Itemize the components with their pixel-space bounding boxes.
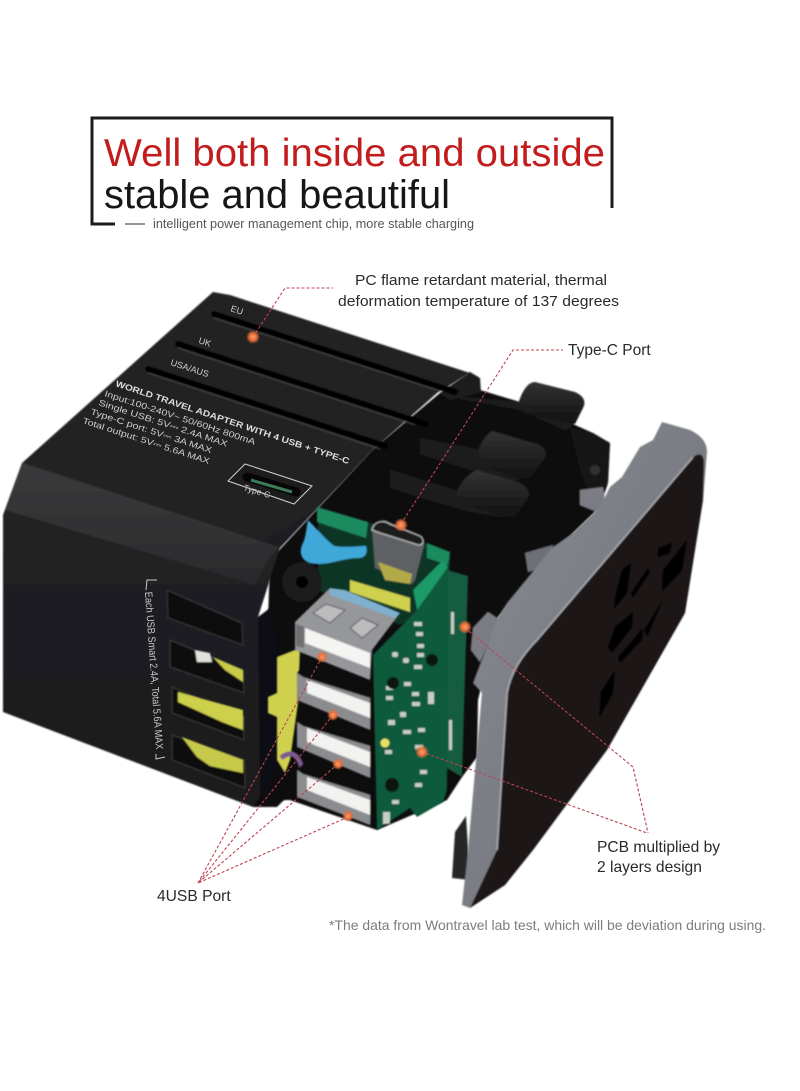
each USB vertical text: Each USB Smart 2.4A, Total 5.6A MAX <box>142 591 165 750</box>
PCB chips <box>387 677 399 689</box>
slot: EU <box>214 314 455 392</box>
leader: usb 3 <box>198 764 338 883</box>
front face with USB openings <box>3 463 280 807</box>
side column <box>258 608 277 807</box>
black round component <box>282 562 322 602</box>
callout: 4USB port: 4USB Port <box>157 888 231 905</box>
circuit boards <box>373 560 468 830</box>
leader: pcb lower <box>422 752 647 833</box>
label: type-c: Type-C <box>242 482 272 500</box>
subtitle: intelligent power management chip, more stable charging <box>153 216 474 231</box>
bottom corner <box>253 770 300 807</box>
leader: usb 4 <box>198 817 348 883</box>
plate support posts <box>580 487 606 512</box>
rear PCB <box>447 570 468 777</box>
slider: lower prong <box>390 470 529 520</box>
callout: type-c port: Type-C Port <box>568 342 651 359</box>
callout: PCB layers <box>597 839 720 876</box>
blue capacitor <box>301 520 367 564</box>
top face labels <box>81 303 351 466</box>
socket holes <box>599 540 687 718</box>
label: type-c spec: Type-C port: 5V⎓ 3A MAX <box>89 406 214 455</box>
front PCB <box>373 560 448 830</box>
usb port 4 <box>297 758 372 825</box>
plate frame <box>462 422 707 908</box>
callout: flame retardant material: deformation temperature of 137 degrees <box>338 293 619 310</box>
label: product name: WORLD TRAVEL ADAPTER WITH 4 USB + TYPE-C <box>114 378 351 466</box>
heading: well both inside and outside: Well both inside and outside <box>104 132 605 175</box>
callout: flame retardant material: PC flame retardant material, thermal <box>355 272 607 289</box>
callout: PCB layers: PCB multiplied by <box>597 839 720 856</box>
top face <box>22 292 470 548</box>
label: input spec: Input:100-240V~ 50/60Hz 800mA <box>103 388 257 447</box>
leader: flame retardant <box>253 288 333 337</box>
front chamfer band <box>5 463 278 585</box>
internal plug mechanism <box>262 372 610 880</box>
leader: usb 2 <box>198 715 333 883</box>
slider: middle prong <box>420 431 546 482</box>
PCB yellow LED <box>380 738 390 748</box>
green board behind type-c <box>318 510 450 625</box>
socket plate <box>462 422 707 908</box>
rear mechanism block <box>570 428 610 500</box>
label: EU: EU <box>229 303 244 317</box>
plate face <box>470 454 704 908</box>
title block <box>92 118 612 231</box>
subtitle rule <box>125 223 145 225</box>
stacked USB ports <box>295 588 400 825</box>
slot: USA/AUS <box>148 369 385 446</box>
adapter product illustration <box>3 292 707 908</box>
USB window openings on front face <box>167 590 245 788</box>
label: UK: UK <box>197 335 212 349</box>
yellow transformer <box>350 580 410 612</box>
label: USA/AUS: USA/AUS <box>169 357 210 379</box>
leader: pcb upper <box>465 628 648 833</box>
label: single USB spec: Single USB: 5V⎓ 2.4A MAX <box>97 397 229 449</box>
PCB solder pads <box>383 612 454 824</box>
callout lines <box>198 288 648 883</box>
callout: PCB layers: 2 layers design <box>597 859 702 876</box>
title frame <box>92 118 612 224</box>
slider: top prong <box>440 382 584 430</box>
internal components <box>268 507 450 773</box>
footnote: *The data from Wontravel lab test, which will be deviation during using. <box>329 917 766 933</box>
label: total output spec: Total output: 5V⎓ 5.6A MAX <box>81 415 211 466</box>
type-c port on top face <box>228 464 312 504</box>
adapter body <box>3 292 470 807</box>
purple wiring <box>281 754 302 768</box>
callout: flame retardant material <box>338 272 619 310</box>
type-c connector <box>372 520 424 584</box>
slot: UK <box>178 344 425 424</box>
callout dots <box>246 330 472 822</box>
usb port 1 <box>295 588 400 680</box>
heading: stable and beautiful: stable and beautiful <box>104 173 450 217</box>
usb port 2 <box>297 662 372 730</box>
usb port 3 <box>297 710 372 778</box>
leader: type-c <box>401 350 563 524</box>
leader: usb 1 <box>198 657 322 883</box>
